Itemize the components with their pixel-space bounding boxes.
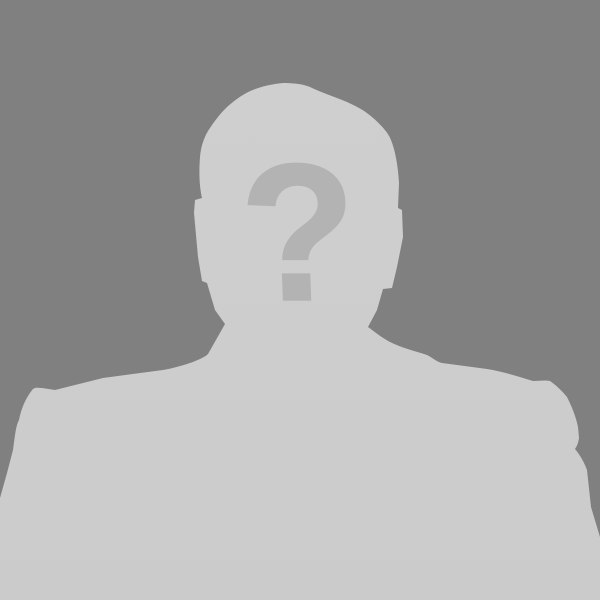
question mark: ? [237,122,360,342]
